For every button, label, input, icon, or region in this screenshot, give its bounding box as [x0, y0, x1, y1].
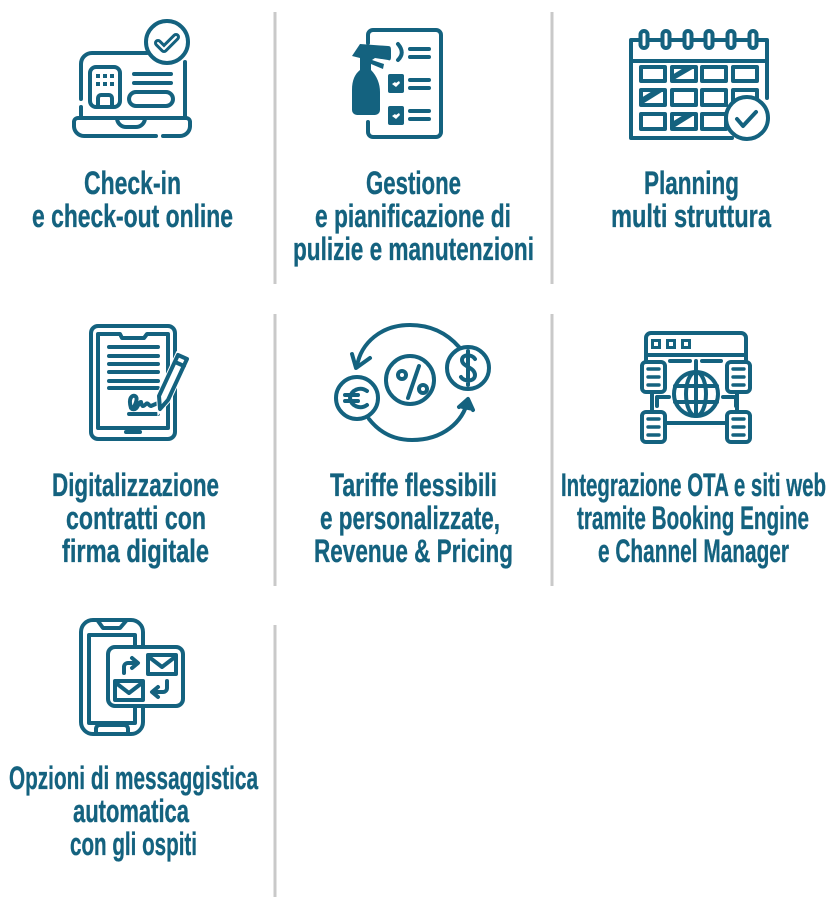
panel: contratti digitali	[52, 326, 219, 569]
heading: messaggistica: con gli ospiti	[70, 826, 197, 862]
panel: messaggistica	[9, 620, 258, 862]
icon: currency exchange with percent	[336, 325, 489, 440]
heading: gestione: Gestione	[366, 165, 461, 201]
heading: tariffe: Revenue & Pricing	[314, 533, 513, 569]
icon: phone with messages	[81, 620, 183, 734]
icon: tablet with signature	[91, 326, 187, 439]
heading: messaggistica	[9, 760, 258, 862]
heading: integrazione	[561, 467, 826, 569]
icon: spray bottle and checklist	[352, 30, 441, 137]
heading: tariffe: Tariffe flessibili	[330, 467, 497, 503]
heading: planning: Planning	[644, 165, 739, 201]
panel: check-in online	[32, 21, 233, 234]
heading: messaggistica: Opzioni di messaggistica	[9, 760, 258, 796]
heading: check-in: e check-out online	[32, 198, 233, 234]
icon: calendar with check	[631, 31, 768, 139]
icon: browser and globe network	[642, 333, 750, 442]
panel: tariffe	[314, 325, 513, 569]
heading: digitalizzazione: firma digitale	[62, 533, 209, 569]
heading: digitalizzazione	[52, 467, 219, 569]
heading: digitalizzazione: contratti con	[66, 500, 206, 536]
heading: gestione: e pianificazione di	[315, 198, 511, 234]
heading: gestione: pulizie e manutenzioni	[293, 231, 534, 267]
heading: planning	[611, 165, 771, 234]
panel: planning	[611, 31, 771, 234]
heading: tariffe: e personalizzate,	[320, 500, 500, 536]
heading: messaggistica: automatica	[73, 793, 189, 829]
heading: check-in: Check-in	[84, 165, 181, 201]
heading: gestione	[293, 165, 534, 267]
heading: check-in	[32, 165, 233, 234]
panel: pulizie e manutenzioni	[293, 30, 534, 267]
heading: digitalizzazione: Digitalizzazione	[52, 467, 219, 503]
heading: tariffe	[314, 467, 513, 569]
heading: planning: multi struttura	[611, 198, 771, 234]
icon: laptop with check	[74, 21, 190, 136]
panel: integrazione OTA	[561, 333, 826, 569]
